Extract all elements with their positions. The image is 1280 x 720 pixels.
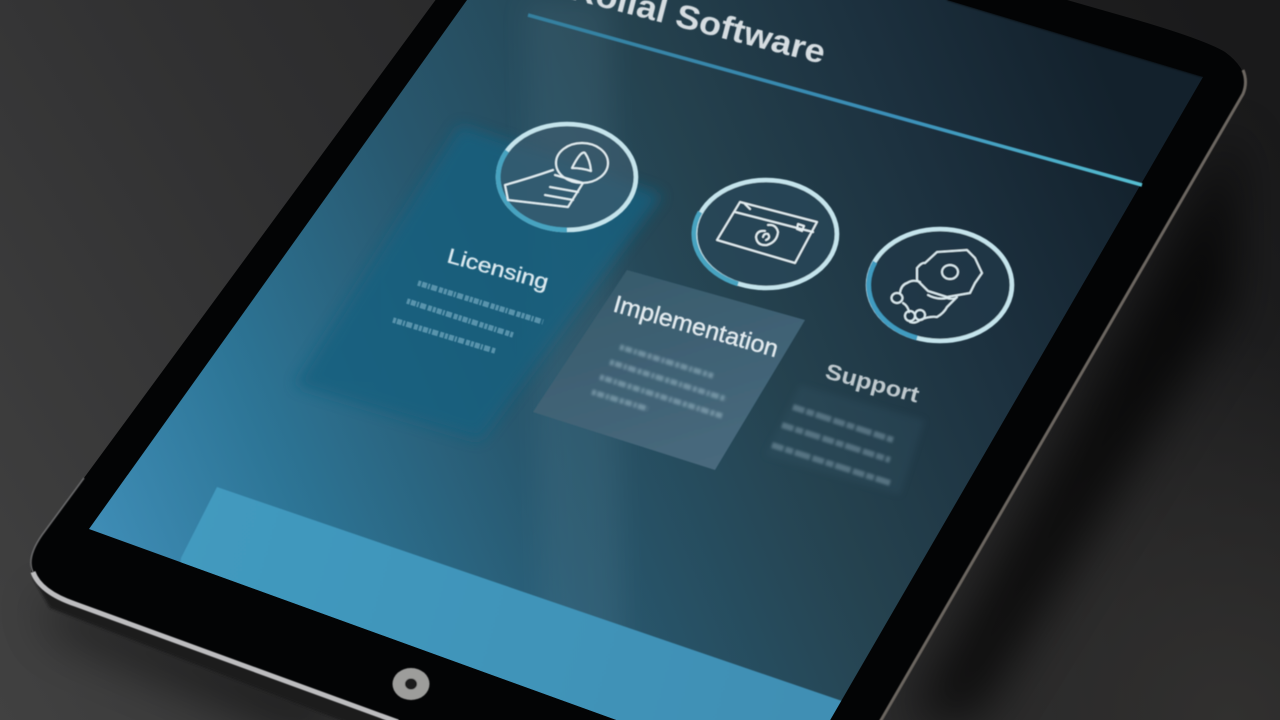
window: [717, 202, 817, 263]
icon: implementation, code window: [694, 180, 837, 288]
title rule: [528, 15, 1142, 185]
bulb and hand: [505, 143, 608, 207]
ring: [695, 180, 837, 288]
home button: [392, 668, 430, 700]
panel: licensing background: [295, 125, 662, 440]
ring progress arc: [869, 262, 917, 338]
screen light band: [540, 12, 604, 618]
ring: [868, 229, 1012, 341]
silver edge: bottom: [33, 572, 398, 720]
silver edge: right: [880, 70, 1246, 720]
text block: support description (illegible in reference): [772, 407, 893, 483]
heading: support: Support: [823, 359, 923, 408]
text block: implementation description (illegible in reference): [592, 347, 726, 416]
text block: licensing description (illegible in reference): [393, 283, 543, 351]
ring progress arc: [498, 151, 567, 230]
panel: implementation background: [533, 270, 805, 470]
panel: support background: [914, 423, 917, 432]
gears: [892, 250, 982, 323]
silver edge: left: [31, 478, 84, 572]
icon: licensing, hand holding light bulb: [498, 124, 636, 230]
ring: [498, 124, 636, 230]
tablet underside: [33, 578, 410, 720]
bottom light panel: [160, 487, 845, 720]
heading: licensing: Licensing: [445, 245, 551, 295]
heading: implementation: Implementation: [610, 291, 781, 363]
icon: support, gears: [868, 229, 1012, 341]
ring progress arc: [694, 212, 738, 284]
soft top bezel edge: [947, 0, 1203, 77]
tablet shadow: [40, 130, 1235, 720]
